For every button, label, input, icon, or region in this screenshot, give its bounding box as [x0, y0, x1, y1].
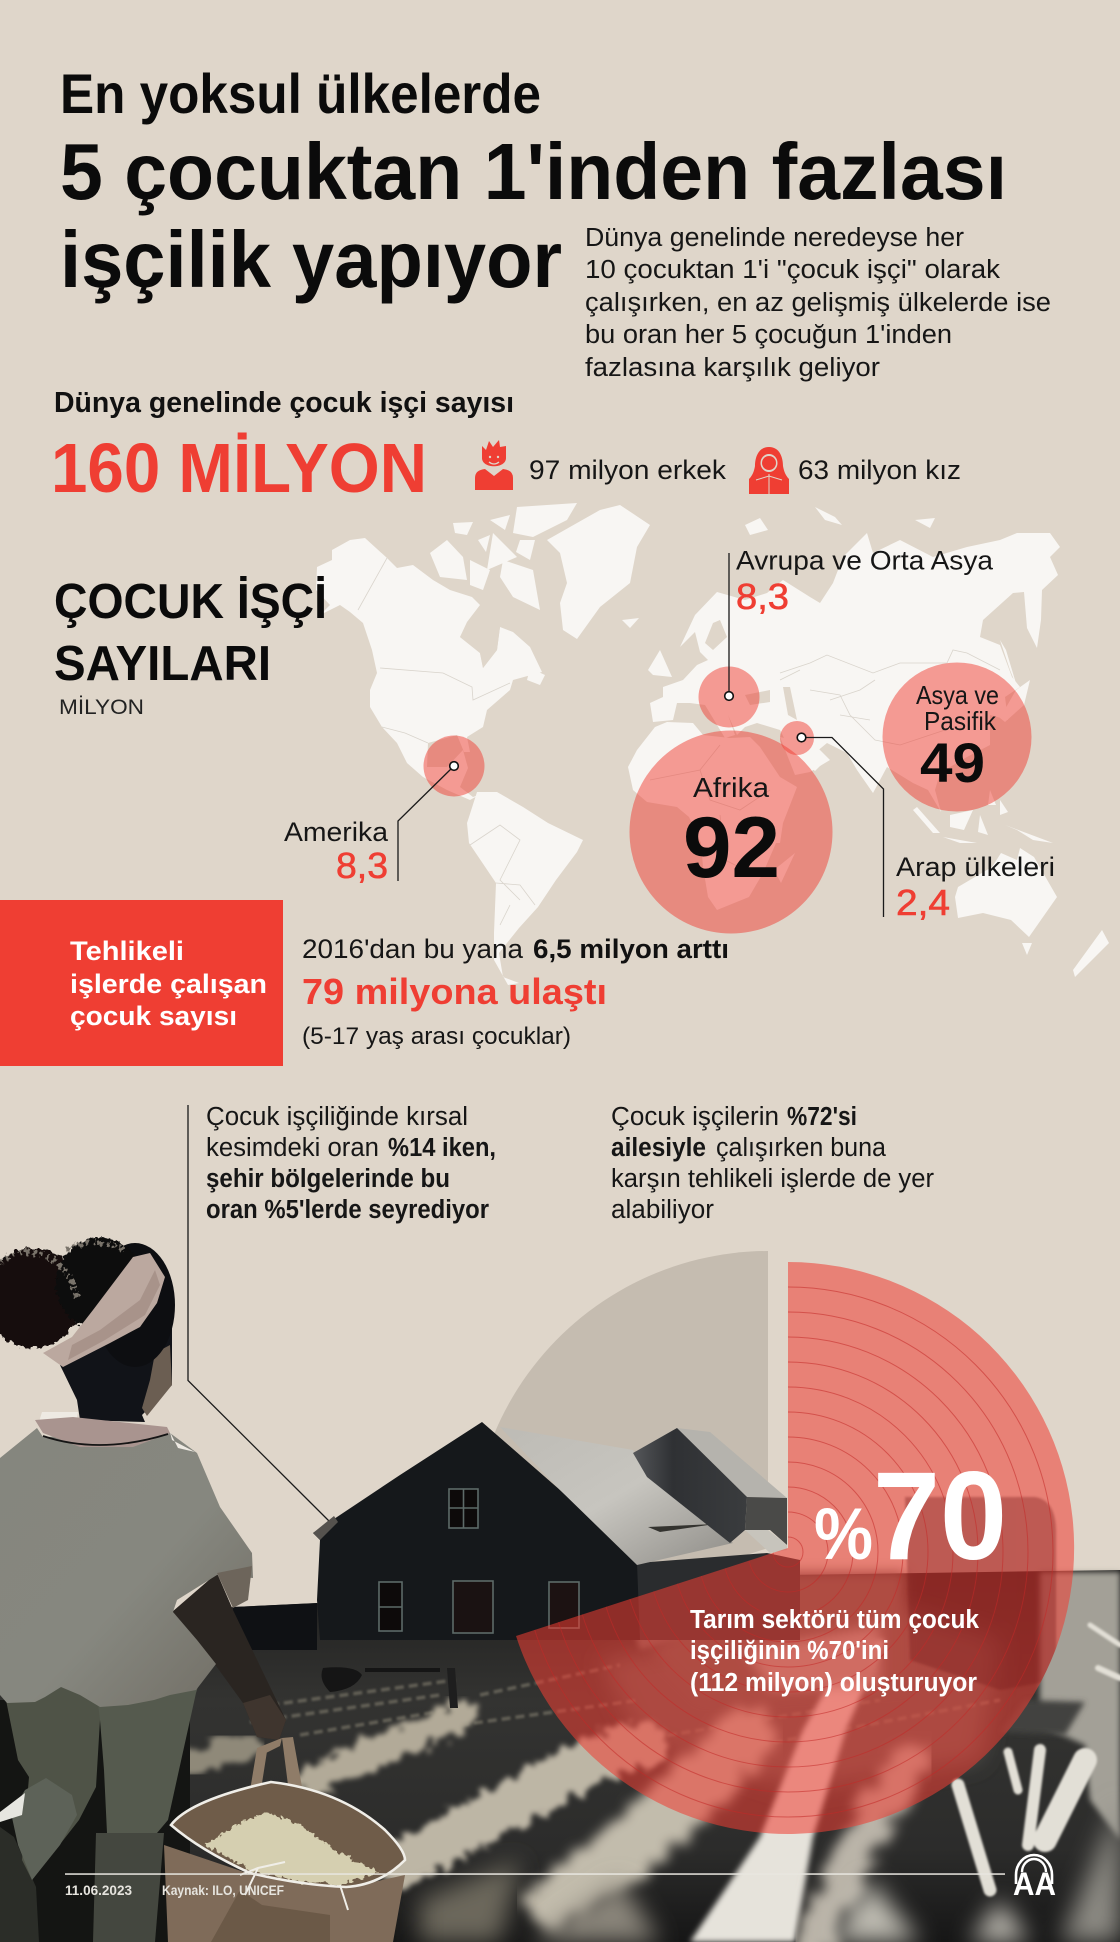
title: 5 çocuktan 1'inden fazlası	[60, 127, 1007, 216]
southeast asia islands	[913, 790, 1053, 843]
tree line	[233, 1603, 317, 1650]
label: Avrupa ve Orta Asya	[736, 546, 994, 617]
leader lines	[398, 553, 884, 917]
bubble: Asya ve Pasifik	[882, 662, 1032, 812]
text: family work: ailesiyle	[611, 1134, 706, 1162]
leader line: rural	[188, 1105, 329, 1521]
arabian peninsula	[780, 737, 830, 775]
hazardous work figures: 79 milyona ulaştı	[302, 971, 607, 1012]
pie caption: işçiliğinin %70'ini	[690, 1637, 889, 1665]
text: rural vs urban: kesimdeki oran	[206, 1134, 379, 1162]
text: rural vs urban: oran %5'lerde seyrediyor	[206, 1196, 489, 1224]
70 percent figure: 70	[873, 1447, 1007, 1586]
icon: girl	[749, 447, 789, 494]
crop row 3	[555, 1735, 745, 1900]
hudson bay	[460, 615, 500, 668]
map heading: ÇOCUK İŞÇİ	[54, 575, 327, 629]
hazardous work figures: 6,5 milyon arttı	[533, 934, 729, 964]
basket	[164, 1737, 405, 1942]
label: Asya ve Pasifik	[916, 680, 999, 794]
title: işçilik yapıyor	[60, 215, 562, 304]
text: rural vs urban	[206, 1103, 496, 1224]
bubble: Avrupa ve Orta Asya	[698, 666, 760, 728]
text: family work: çalışırken buna	[716, 1134, 887, 1162]
70 percent figure	[814, 1447, 1007, 1586]
windows	[379, 1489, 579, 1633]
hazardous work figures: 2016'dan bu yana	[302, 934, 524, 964]
interior	[171, 1782, 405, 1887]
white shoulder light	[38, 1412, 195, 1452]
great britain	[648, 650, 672, 677]
madagascar	[774, 853, 795, 883]
white cord	[240, 1862, 348, 1910]
label: Arap ülkeleri: 2,4	[896, 882, 950, 923]
crop row 1	[310, 1716, 462, 1782]
collar	[35, 1417, 170, 1447]
hazardous work figures: (5-17 yaş arası çocuklar)	[302, 1023, 571, 1050]
icon: boy	[475, 440, 513, 490]
hazardous work figures	[302, 934, 729, 1050]
bubble: Amerika	[424, 736, 484, 796]
hair puff left	[0, 1248, 81, 1348]
map heading: MİLYON	[59, 696, 144, 719]
pie caption: Tarım sektörü tüm çocuk	[690, 1606, 980, 1634]
pie remainder (grey sector)	[471, 1251, 768, 1640]
dark truck shape through pie	[905, 1497, 1056, 1690]
crop row 4	[815, 1760, 912, 1942]
dark space between legs	[0, 1700, 190, 1942]
text: rural vs urban: %14 iken,	[388, 1134, 496, 1162]
bubble: Arap ülkeleri	[780, 721, 814, 755]
inland seas	[705, 620, 797, 720]
footer source: 11.06.2023	[65, 1883, 132, 1898]
flap	[211, 1890, 330, 1942]
intro paragraph	[585, 224, 1051, 382]
greenland	[547, 505, 650, 639]
crop row 0	[179, 1743, 250, 1767]
label: Asya ve Pasifik: Pasifik	[924, 706, 997, 736]
crop row 2	[400, 1745, 645, 1865]
footer source: Kaynak: ILO, UNICEF	[162, 1883, 284, 1898]
headband	[43, 1253, 165, 1367]
knee highlight	[0, 1793, 25, 1822]
intro paragraph: 10 çocuktan 1'i "çocuk işçi" olarak	[585, 256, 1000, 284]
right field light area	[1040, 1572, 1120, 1840]
boys count: 97 milyon erkek	[529, 455, 727, 485]
text: family work	[611, 1103, 935, 1224]
dormer wall	[633, 1428, 747, 1543]
head back	[95, 1243, 175, 1367]
photo: farmhouse	[233, 1422, 800, 1650]
right calf	[93, 1833, 164, 1942]
160 million figure: 160 MİLYON	[51, 429, 427, 507]
country borders	[358, 558, 1000, 925]
photo: farm field	[0, 1565, 1120, 1942]
tasmania	[1022, 943, 1032, 955]
roof slit	[648, 1524, 715, 1532]
sakhalin	[1000, 640, 1018, 690]
world total heading: Dünya genelinde çocuk işçi sayısı	[54, 387, 514, 419]
intro paragraph: bu oran her 5 çocuğun 1'inden	[585, 321, 952, 349]
tractor lot behind fence	[650, 1572, 905, 1700]
main gable wall	[313, 1422, 700, 1640]
handle	[246, 1737, 302, 1815]
hair puff right	[56, 1238, 144, 1330]
distant field stripes	[250, 1665, 1000, 1745]
lower right wall	[637, 1553, 800, 1640]
eave highlight	[313, 1516, 338, 1540]
south america	[467, 792, 583, 985]
dormer roof	[677, 1428, 787, 1498]
fence glow	[620, 1565, 790, 1650]
label: Asya ve Pasifik: 49	[920, 731, 985, 794]
body	[164, 1845, 405, 1942]
label: Afrika: 92	[683, 800, 780, 896]
mid ground lighter area under pie	[600, 1610, 1000, 1790]
70 percent figure: %	[814, 1494, 873, 1575]
shed	[745, 1497, 787, 1545]
panel: hazardous work: çocuk sayısı	[70, 1001, 237, 1031]
blurred foreground	[40, 1800, 1120, 1942]
hair highlights	[0, 1243, 125, 1298]
canadian arctic islands	[430, 503, 577, 685]
neck	[60, 1320, 172, 1422]
cart and post	[322, 1667, 440, 1692]
text: family work: Çocuk işçilerin	[611, 1103, 779, 1131]
label: Avrupa ve Orta Asya: Avrupa ve Orta Asya	[736, 546, 994, 576]
right thigh	[95, 1680, 200, 1833]
text: rural vs urban: şehir bölgelerinde bu	[206, 1165, 450, 1193]
main roof	[500, 1427, 733, 1565]
logo: AA: AA	[1013, 1866, 1056, 1902]
pie chart: 70 percent	[516, 1262, 1074, 1834]
new zealand	[1073, 930, 1109, 977]
ear shade	[142, 1345, 172, 1416]
africa	[628, 722, 797, 910]
pie caption	[690, 1606, 980, 1697]
knee back	[11, 1778, 77, 1880]
location dots	[450, 692, 806, 770]
road upper glow	[745, 1625, 880, 1690]
text: family work: %72'si	[787, 1103, 857, 1131]
concentric rings	[523, 1287, 1053, 1817]
label: Arap ülkeleri	[896, 852, 1055, 923]
australia	[955, 848, 1057, 937]
intro paragraph: fazlasına karşılık geliyor	[585, 354, 881, 382]
panel: hazardous work: Tehlikeli	[70, 936, 184, 966]
intro paragraph: Dünya genelinde neredeyse her	[585, 224, 965, 252]
text: family work: alabiliyor	[611, 1196, 715, 1224]
label: Amerika: Amerika	[284, 817, 389, 847]
japan	[1000, 680, 1030, 722]
intro paragraph: çalışırken, en az gelişmiş ülkelerde ise	[585, 289, 1051, 317]
title	[60, 62, 1007, 304]
dark grain patch	[1000, 1700, 1085, 1735]
sleeve cuff	[217, 1566, 252, 1608]
text: rural vs urban: Çocuk işçiliğinde kırsal	[206, 1103, 468, 1131]
label: Avrupa ve Orta Asya: 8,3	[736, 576, 789, 617]
label: Arap ülkeleri: Arap ülkeleri	[896, 852, 1055, 882]
north america	[316, 538, 542, 800]
map heading: SAYILARI	[54, 637, 271, 691]
left thigh	[2, 1680, 104, 1880]
map heading	[54, 575, 327, 719]
far calf	[0, 1827, 39, 1942]
straw	[205, 1812, 378, 1884]
label: Asya ve Pasifik: Asya ve	[916, 680, 999, 710]
rim	[171, 1782, 405, 1887]
footer source	[65, 1883, 284, 1898]
arm	[172, 1573, 286, 1740]
bubble: Afrika	[630, 730, 832, 934]
girls count: 63 milyon kız	[798, 455, 961, 485]
panel: hazardous work	[0, 900, 283, 1066]
shirt	[0, 1428, 253, 1707]
text: family work: karşın tehlikeli işlerde de yer	[611, 1165, 935, 1193]
title: En yoksul ülkelerde	[60, 62, 541, 125]
footer rule	[65, 1873, 1005, 1875]
iceland	[622, 618, 639, 628]
hand	[243, 1695, 286, 1740]
headband fold	[68, 1270, 160, 1360]
pie caption: (112 milyon) oluşturuyor	[690, 1669, 977, 1697]
svalbard and russian arctic islands	[745, 507, 935, 535]
panel: hazardous work: işlerde çalışan	[70, 969, 267, 999]
label: Amerika	[284, 817, 389, 886]
label: Amerika: 8,3	[336, 845, 388, 886]
eurasia	[650, 533, 1060, 812]
label: Afrika: Afrika	[693, 772, 769, 803]
photo: child with basket	[0, 1238, 286, 1942]
right white streaks	[958, 1625, 1120, 1890]
world map	[316, 503, 1109, 985]
bright road	[690, 1640, 885, 1942]
